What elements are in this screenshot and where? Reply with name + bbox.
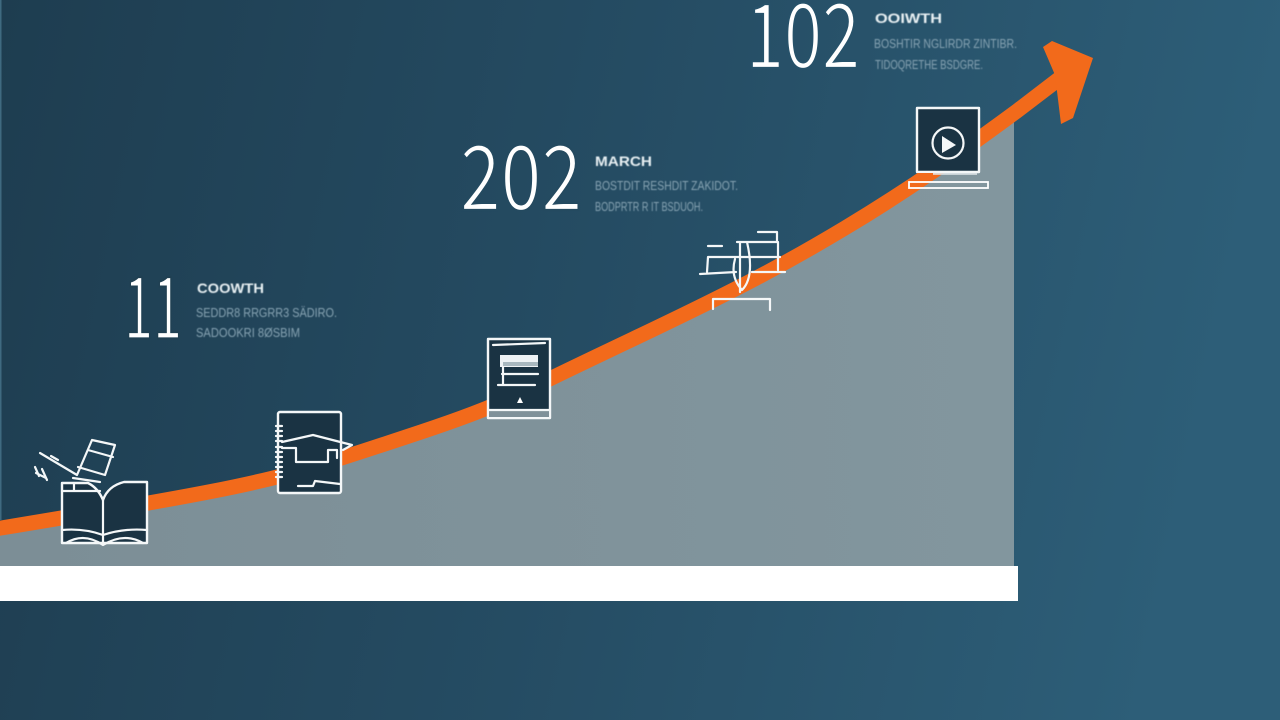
icon: tablet with list — [488, 339, 550, 418]
icon: open book with ladder — [35, 440, 147, 545]
milestone 1 text: COOWTH — [197, 280, 264, 296]
milestone 1 text: SADOOKRI 8ØSBIM — [196, 325, 300, 340]
milestone 2 text: BOSTDIT RESHDIT ZAKIDOT. — [595, 178, 738, 193]
milestone 2 text: 202 — [460, 106, 582, 236]
orange growth arrow — [0, 41, 1093, 529]
white base bar — [0, 566, 1018, 601]
grey area under the curve — [0, 122, 1014, 566]
milestone 3 text: TIDOQRETHE BSDGRE. — [875, 57, 983, 72]
milestone 3 text — [746, 0, 1017, 94]
icon: video monitor with play button — [909, 108, 988, 188]
milestone 3 text: OOIWTH — [875, 10, 942, 26]
icon: notebook with graduation cap — [276, 412, 352, 493]
icon: lectern and books — [700, 232, 785, 310]
milestone 1 text — [124, 238, 337, 364]
milestone 1 text: SEDDR8 RRGRR3 SÄDIRO. — [196, 305, 337, 320]
milestone 2 text — [460, 106, 738, 236]
milestone 2 text: MARCH — [595, 153, 652, 169]
milestone 1 text: 11 — [124, 238, 182, 364]
milestone 3 text: BOSHTIR NGLIRDR ZINTIBR. — [874, 36, 1017, 51]
milestone 2 text: BODPRTR R IT BSDUOH. — [595, 199, 703, 214]
